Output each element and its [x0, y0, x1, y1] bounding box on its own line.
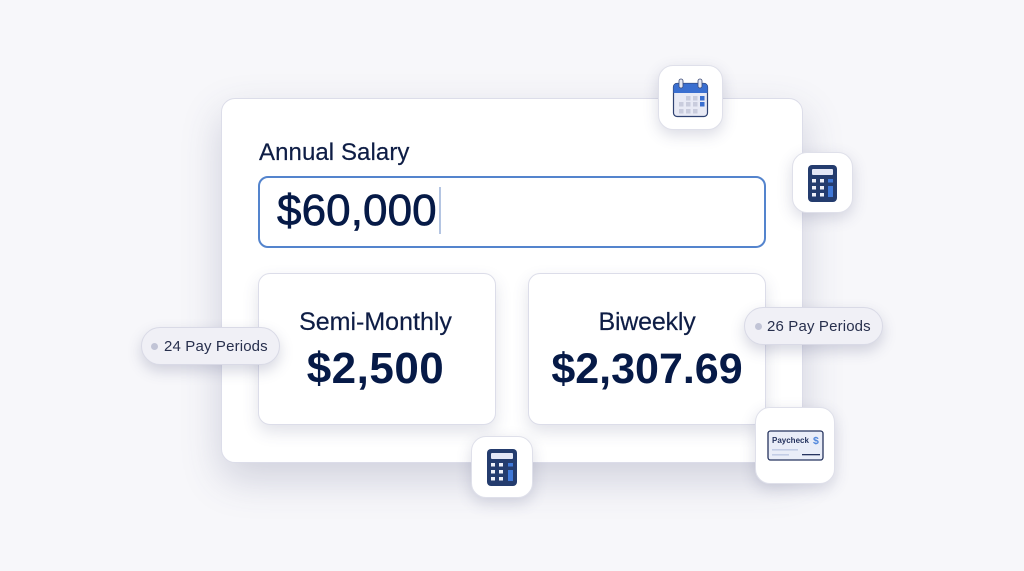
status dot [151, 343, 158, 350]
semi-monthly heading: Semi-Monthly [299, 308, 452, 336]
icon: calculator tile bottom [471, 436, 533, 498]
icon: calendar tile [658, 65, 723, 130]
icon: paycheck tile [755, 407, 835, 484]
icon: paycheck tile: Paycheck [772, 436, 809, 445]
pill text: 24 Pay Periods [164, 338, 268, 355]
heading: annual salary label: Annual Salary [259, 139, 409, 166]
panel: salary calculator card [221, 98, 803, 463]
panel: semi-monthly result [258, 273, 496, 425]
salary input field [258, 176, 766, 248]
panel: biweekly result [528, 273, 766, 425]
callout: 24 pay periods [141, 327, 280, 365]
icon: calculator tile right [792, 152, 853, 213]
icon: paycheck tile: $ [813, 435, 819, 447]
biweekly heading: Biweekly [598, 308, 696, 336]
text cursor [439, 187, 441, 234]
semi-monthly amount: $2,500 [307, 344, 444, 393]
status dot [755, 323, 762, 330]
callout: 26 pay periods [744, 307, 883, 345]
biweekly amount: $2,307.69 [551, 345, 743, 393]
pill text: 26 Pay Periods [767, 318, 871, 335]
input value: $60,000 [277, 186, 437, 235]
